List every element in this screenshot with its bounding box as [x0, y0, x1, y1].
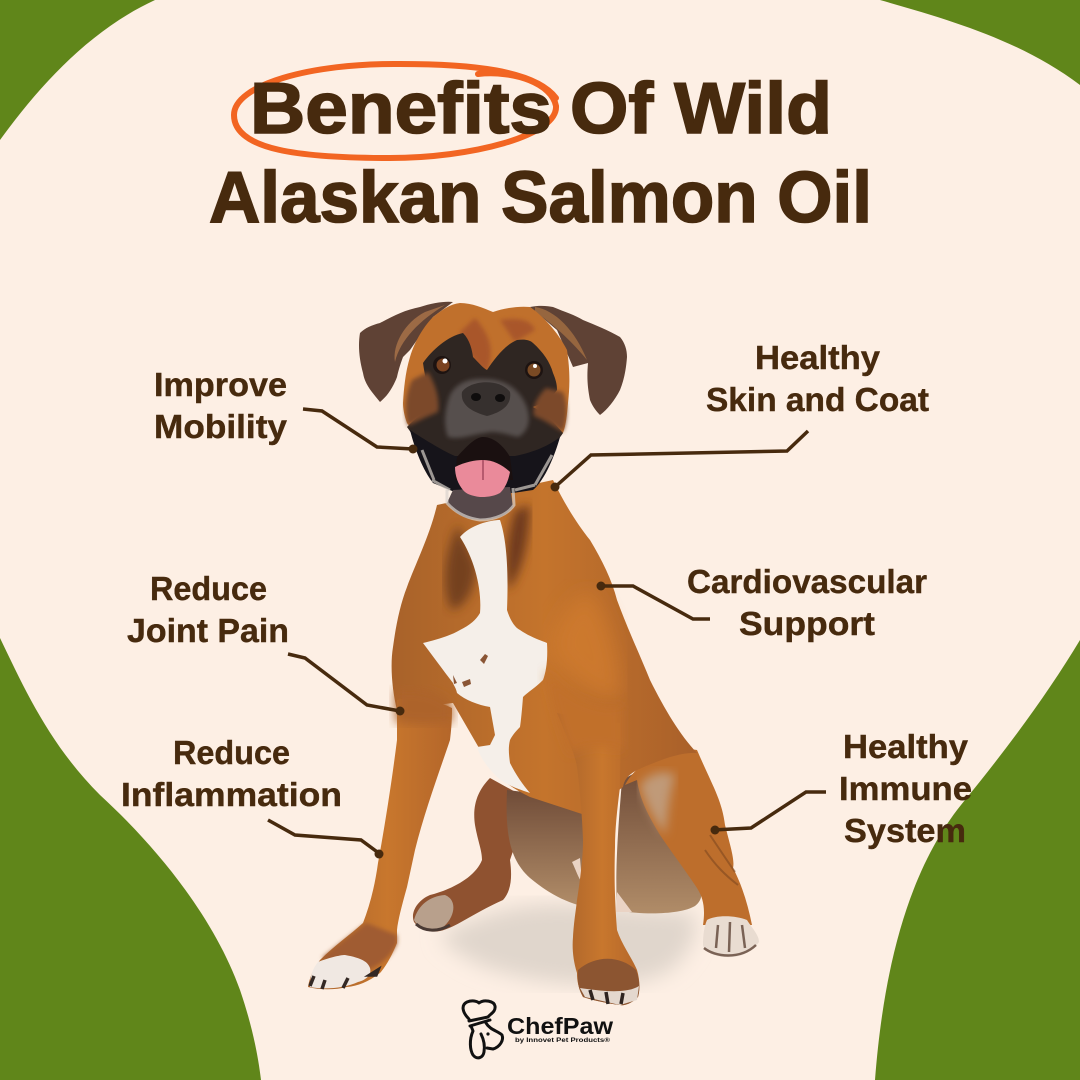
leader line — [710, 792, 826, 834]
green corner shape: top right — [880, 0, 1080, 85]
title line 1 — [250, 69, 832, 149]
torso and neck — [392, 480, 697, 815]
left paw claws — [310, 970, 378, 989]
green corner shape: bottom right — [875, 640, 1080, 1080]
right ear — [530, 306, 627, 415]
leader line — [550, 431, 808, 492]
title line 1: Of Wild — [570, 69, 832, 149]
label: Inflammation — [121, 776, 342, 813]
green corner shape: top left — [0, 0, 155, 140]
belly left — [507, 790, 590, 905]
title line 1: Benefits — [250, 69, 552, 149]
nostrils — [471, 393, 505, 402]
near paw claws — [580, 986, 639, 1005]
leader line — [288, 654, 404, 716]
leader line — [268, 820, 384, 858]
skull — [403, 303, 569, 470]
icon: chef dog — [463, 1001, 503, 1058]
mouth — [455, 437, 513, 480]
callout: reduce joint pain — [127, 570, 404, 716]
hand-drawn highlight circle — [234, 64, 556, 158]
chin white edge — [447, 488, 514, 520]
logo tagline: by Innovet Pet Products® — [515, 1036, 610, 1044]
label: Immune — [839, 770, 972, 807]
left foreleg — [308, 698, 452, 989]
label: Reduce — [173, 734, 290, 771]
right cheek brown — [534, 388, 567, 432]
left paw brown — [322, 923, 397, 972]
haunch — [625, 749, 752, 925]
green corner shape: bottom left — [0, 638, 261, 1080]
shoulder highlight — [550, 590, 620, 700]
far hind paw — [414, 895, 453, 930]
logo: ChefPaw — [463, 1001, 613, 1058]
left shoulder blend — [395, 688, 452, 724]
label: Support — [739, 605, 875, 642]
haunch folds — [705, 835, 738, 885]
title line 2: Alaskan Salmon Oil — [209, 158, 872, 238]
label: Joint Pain — [127, 612, 289, 649]
hind paw markings — [704, 922, 756, 956]
label: Cardiovascular — [687, 563, 927, 600]
left chest shading — [445, 525, 476, 610]
left eye — [433, 356, 451, 374]
muzzle grey fur — [445, 379, 529, 438]
forehead highlight — [460, 318, 535, 372]
label: Healthy — [843, 728, 969, 765]
right ear fold — [535, 307, 587, 360]
white chest marking — [423, 520, 547, 793]
hind paw — [703, 916, 759, 957]
chin — [447, 487, 513, 520]
pink detail — [572, 858, 632, 912]
left ear — [359, 302, 453, 402]
nose — [462, 382, 510, 416]
callout: reduce inflammation — [121, 734, 384, 858]
icon: dog eye — [486, 1032, 490, 1036]
left ear fold — [395, 305, 445, 362]
lip fur edges — [422, 450, 552, 490]
label: System — [844, 812, 966, 849]
label: Improve — [154, 366, 287, 403]
haunch light patch — [640, 772, 675, 835]
label: Skin and Coat — [706, 381, 929, 418]
far hind paw toes — [416, 924, 450, 930]
tongue crease — [482, 460, 484, 480]
leader line — [596, 582, 710, 619]
floor shadow — [440, 904, 696, 985]
belly right — [616, 770, 701, 913]
callout: cardiovascular support — [596, 563, 927, 642]
far hind leg — [413, 778, 530, 932]
left paw white — [310, 955, 370, 988]
near foreleg top blend — [545, 670, 622, 755]
near front paw — [578, 959, 639, 1005]
near foreleg — [557, 713, 639, 1005]
chest specks — [453, 654, 488, 687]
tongue — [455, 460, 510, 497]
label: Healthy — [755, 339, 881, 376]
leader line — [303, 409, 418, 454]
callout: healthy skin and coat — [550, 339, 929, 492]
lower lips — [410, 430, 560, 493]
callout: improve mobility — [154, 366, 418, 454]
callout: healthy immune system — [710, 728, 972, 849]
dog illustration — [308, 302, 759, 1005]
dark face mask — [407, 333, 563, 480]
neck shading — [506, 505, 530, 590]
head — [359, 302, 627, 520]
near paw toes — [590, 990, 623, 1004]
left cheek brown — [406, 372, 439, 426]
logo wordmark: ChefPaw — [507, 1013, 613, 1039]
title — [209, 64, 872, 238]
label: Mobility — [154, 408, 288, 445]
label: Reduce — [150, 570, 267, 607]
right eye — [525, 361, 543, 379]
